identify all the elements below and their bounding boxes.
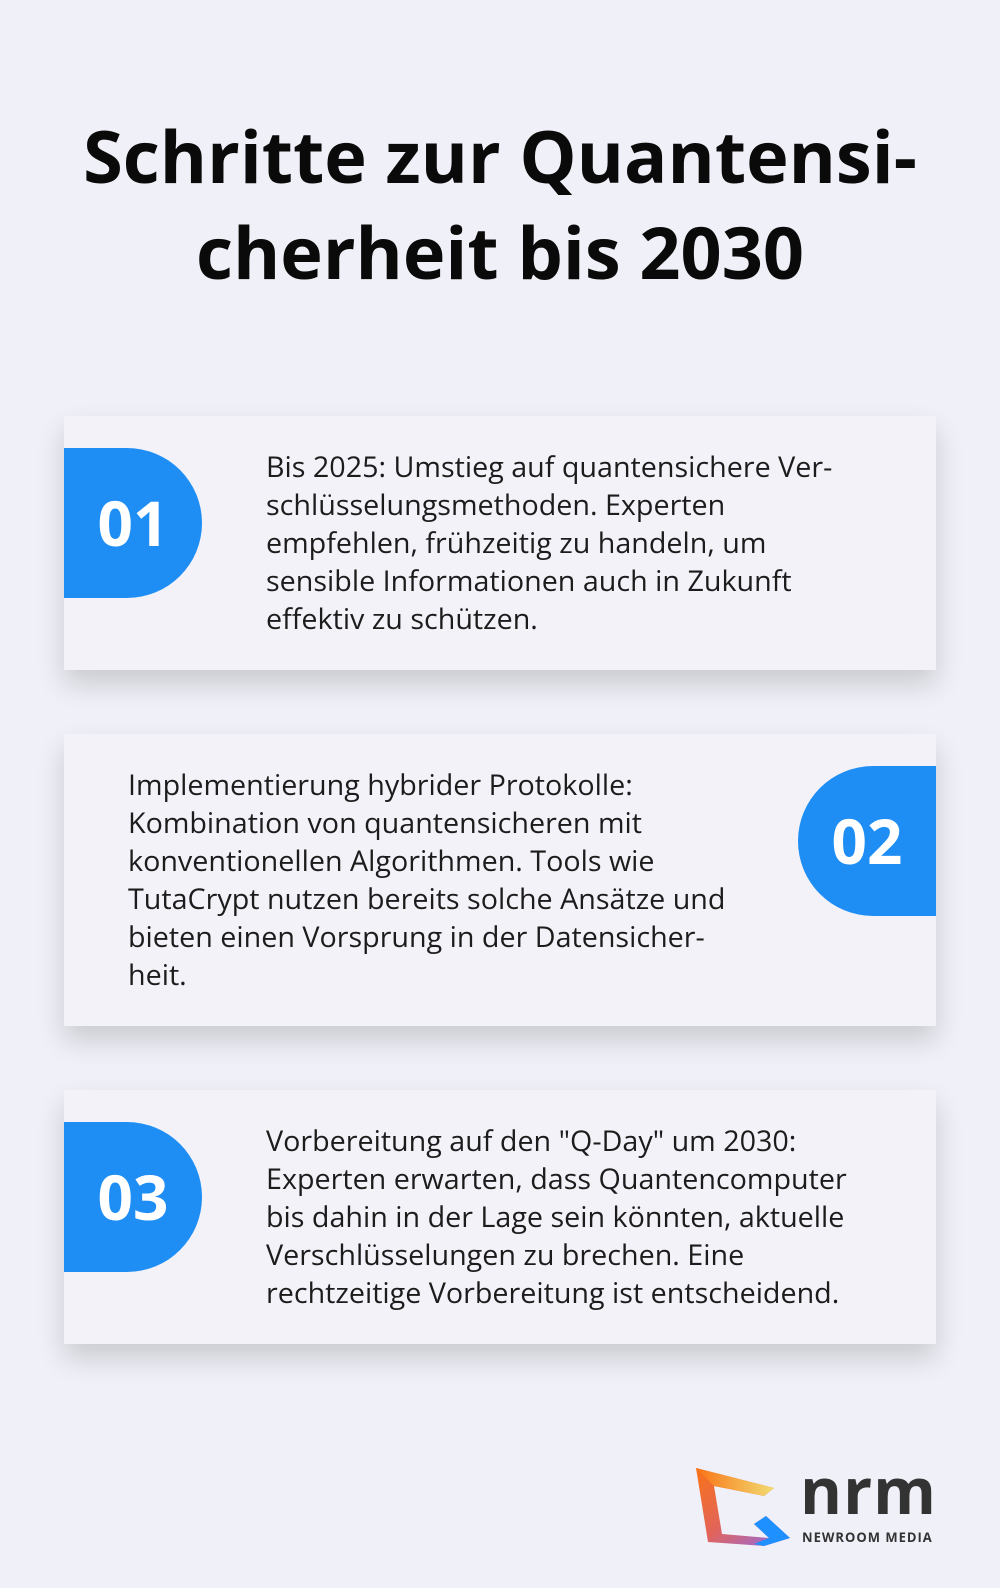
text step 03: Vorbereitung auf den "Q-Day" um 2030: <box>266 1121 796 1160</box>
text step 01: schlüsselungsmethoden. Experten <box>266 485 725 524</box>
panel: step 03 <box>64 1090 936 1344</box>
text step 02: heit. <box>128 955 187 994</box>
title: Schritte zur Quantensi- <box>83 107 917 205</box>
title: cherheit bis 2030 <box>196 203 804 301</box>
badge 02 <box>798 766 936 916</box>
text step 01: Bis 2025: Umstieg auf quantensichere Ver- <box>266 447 832 486</box>
text step 02: Kombination von quantensicheren mit <box>128 803 642 842</box>
badge 02: 02 <box>832 799 902 883</box>
badge 01 <box>64 448 202 598</box>
badge 01: 01 <box>98 481 168 565</box>
text step 01: effektiv zu schützen. <box>266 599 538 638</box>
text step 02: Implementierung hybrider Protokolle: <box>128 765 633 804</box>
logo text: nrm <box>800 1446 937 1533</box>
logo: NEWROOM MEDIA <box>802 1528 933 1546</box>
logo <box>696 1446 937 1546</box>
text step 03: Experten erwarten, dass Quantencomputer <box>266 1159 847 1198</box>
text step 03: rechtzeitige Vorbereitung ist entscheidend. <box>266 1273 839 1312</box>
text step 01: sensible Informationen auch in Zukunft <box>266 561 792 600</box>
panel: step 01 <box>64 416 936 670</box>
badge 03: 03 <box>98 1155 168 1239</box>
text step 01: empfehlen, frühzeitig zu handeln, um <box>266 523 766 562</box>
text step 02: konventionellen Algorithmen. Tools wie <box>128 841 655 880</box>
text step 03: Verschlüsselungen zu brechen. Eine <box>266 1235 744 1274</box>
text step 02 <box>128 765 725 994</box>
title <box>83 107 917 301</box>
text step 02: TutaCrypt nutzen bereits solche Ansätze und <box>128 879 725 918</box>
badge 03 <box>64 1122 202 1272</box>
text step 01 <box>266 447 832 638</box>
icon: logo mark <box>696 1468 790 1546</box>
text step 03 <box>266 1121 847 1312</box>
panel: step 02 <box>64 734 936 1026</box>
text step 03: bis dahin in der Lage sein könnten, aktuelle <box>266 1197 844 1236</box>
text step 02: bieten einen Vorsprung in der Datensicher- <box>128 917 705 956</box>
